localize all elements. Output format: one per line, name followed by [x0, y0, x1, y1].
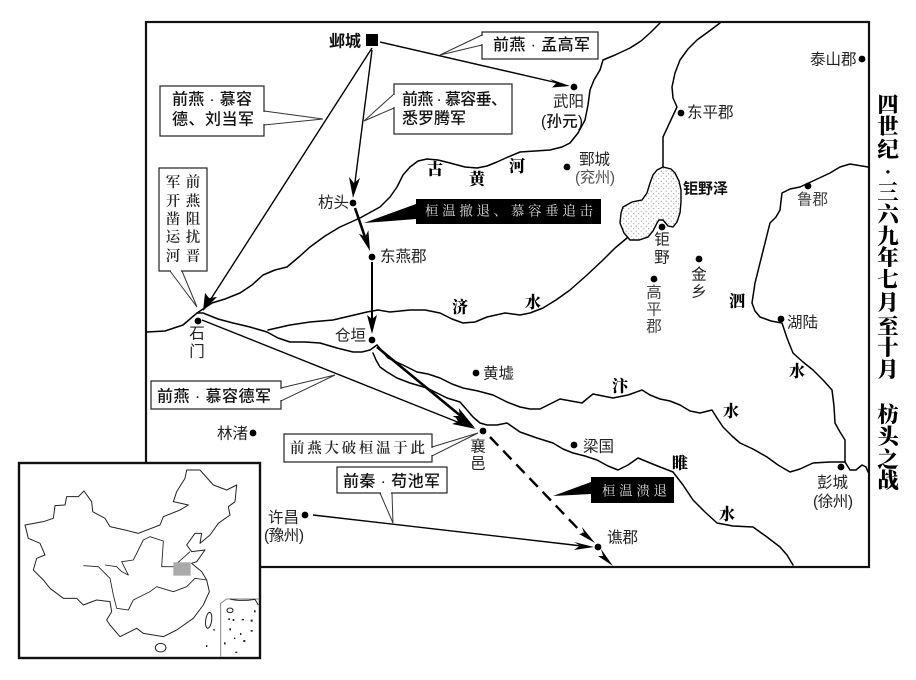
route: retreat Fangtou to Dongyan — [355, 208, 370, 251]
callout: Murong Chui and Xiluo Teng army: 前燕 · 慕容垂、 — [402, 90, 507, 108]
title: vertical heading: 七 — [877, 268, 899, 292]
title: vertical heading: 月 — [877, 291, 899, 315]
title: vertical heading: 年 — [877, 245, 899, 270]
title: vertical heading: 六 — [877, 203, 901, 227]
callout: Murong De and Liu Dang army: 德、刘当军 — [172, 110, 254, 128]
callout: Murong Chui and Xiluo Teng army — [364, 84, 512, 134]
place labels: 石 — [189, 326, 205, 342]
place labels: (兖州) — [575, 168, 615, 186]
lake: Juye Ze — [620, 167, 681, 240]
inset: Yangtze River — [83, 566, 207, 610]
callout: Former Yan blocks the canal — [159, 168, 207, 307]
place labels: 邑 — [470, 456, 486, 472]
place labels: 邺城 — [329, 32, 361, 50]
place labels: 泰山郡 — [810, 50, 857, 68]
place labels: 梁国 — [583, 438, 614, 456]
rivers — [147, 23, 868, 565]
callout: Murong De and Liu Dang army: 前燕 · 慕容 — [172, 90, 252, 108]
river labels: 汴 — [612, 376, 630, 396]
callout: Former Yan blocks the canal: 前 — [186, 174, 201, 191]
route: Yecheng to Shimen — [203, 48, 372, 311]
place labels: (徐州) — [813, 492, 853, 510]
place labels: 门 — [189, 342, 205, 360]
river: canal and Bian branch — [197, 313, 377, 352]
river: Si shui — [752, 164, 868, 472]
river: Bian shui — [377, 345, 845, 472]
callout: Murong De and Liu Dang army — [160, 86, 323, 136]
place labels: 高 — [646, 284, 662, 302]
inset: national border — [25, 470, 237, 637]
title: vertical heading: · — [884, 160, 892, 184]
title: vertical heading: 枋 — [877, 403, 899, 427]
river labels: 睢 — [672, 454, 688, 472]
place labels: 黄墟 — [483, 364, 514, 382]
place labels: 野 — [654, 248, 670, 266]
title: vertical heading: 至 — [877, 315, 899, 339]
callout: Former Yan blocks the canal: 凿 — [166, 210, 181, 228]
place labels: 郡 — [646, 318, 662, 336]
title: vertical heading: 十 — [877, 336, 899, 360]
place labels: (孙元) — [541, 112, 583, 130]
callout: Murong Chui and Xiluo Teng army: 悉罗腾军 — [402, 110, 466, 128]
inset: Hainan island — [155, 643, 166, 652]
river: upper Ji to lake — [663, 23, 720, 167]
callout: Former Yan blocks the canal: 燕 — [186, 193, 202, 210]
marker: Yecheng capital — [366, 34, 378, 46]
river labels: 水 — [723, 402, 739, 420]
place labels: 东平郡 — [687, 104, 734, 122]
title: vertical heading: 世 — [877, 115, 899, 139]
route: retreat Dongyan to Cangyuan — [367, 262, 377, 334]
river labels: 泗 — [729, 292, 745, 310]
place labels: 湖陆 — [787, 314, 818, 332]
place dots — [195, 56, 865, 550]
inset: South China Sea box — [206, 599, 259, 657]
callout: Murong De army — [151, 375, 335, 409]
callout: Former Yan defeats Huan Wen here: 前燕大破桓温于此 — [290, 439, 425, 457]
callout: Meng Gao army — [440, 32, 598, 59]
inset: Yellow River — [105, 537, 190, 575]
title: vertical heading: 头 — [877, 425, 901, 449]
place labels: 枋头 — [318, 194, 349, 212]
title: vertical heading — [877, 93, 901, 493]
callout: Meng Gao army: 前燕 · 孟高军 — [493, 36, 590, 54]
route: retreat Cangyuan to Xiangyi — [377, 347, 475, 428]
title: vertical heading: 纪 — [877, 138, 899, 162]
army routes — [202, 42, 613, 566]
place labels: 许昌 — [268, 508, 299, 526]
place labels: 仓垣 — [335, 326, 366, 344]
callout: Huan Wen routed — [553, 477, 674, 503]
place labels — [189, 32, 857, 546]
place labels: 林渚 — [217, 424, 248, 442]
route: Shimen to Xiangyi — [202, 320, 476, 429]
map frame — [146, 22, 869, 567]
route: Yecheng to Wuyang — [380, 42, 570, 88]
river labels: 水 — [525, 292, 541, 312]
callout: Huan Wen routed: 桓温溃退 — [602, 482, 667, 498]
river: Sui shui — [373, 353, 793, 565]
callout: Former Yan defeats Huan Wen here — [284, 433, 478, 462]
route: Xuchang to Qiaojun — [313, 515, 594, 550]
river labels: 古 — [427, 160, 443, 178]
place labels: (豫州) — [264, 526, 304, 544]
title: vertical heading: 四 — [877, 93, 899, 117]
place labels: 武阳 — [553, 92, 584, 110]
place labels: 金 — [691, 266, 707, 284]
place labels: 钜 — [654, 230, 670, 248]
river: Gu Huanghe — [147, 23, 660, 332]
callout: Former Yan blocks the canal: 军 — [166, 174, 181, 191]
place labels: 鄄城 — [579, 150, 611, 168]
callout: Gou Chi army — [337, 467, 447, 523]
inset: China locator map — [19, 463, 260, 658]
title: vertical heading: 之 — [877, 448, 899, 472]
title: vertical heading: 三 — [877, 181, 899, 205]
river labels: 河 — [509, 158, 525, 176]
callout: Former Yan blocks the canal: 开 — [166, 193, 181, 210]
inset: Taiwan island — [205, 612, 213, 629]
place labels: 彭城 — [817, 474, 849, 492]
river: Ji shui — [268, 238, 627, 330]
place labels: 乡 — [691, 284, 707, 300]
callout: Gou Chi army: 前秦 · 苟池军 — [343, 472, 440, 490]
place labels: 钜野泽 — [683, 180, 728, 198]
callout: Huan Wen retreats, Murong Chui pursues — [364, 199, 601, 224]
route: dashed rout to Qiaojun — [490, 437, 613, 566]
river labels: 水 — [789, 362, 805, 380]
river labels: 黄 — [469, 170, 488, 188]
place labels: 平 — [646, 302, 662, 318]
route: Yecheng to Fangtou — [349, 50, 372, 198]
river labels: 水 — [719, 504, 735, 524]
callout: Huan Wen retreats, Murong Chui pursues: 桓温撤退、慕容垂追击 — [425, 202, 594, 218]
callout: Former Yan blocks the canal: 晋 — [186, 248, 200, 265]
place labels: 谯郡 — [607, 528, 638, 546]
inset: highlighted battle region — [173, 562, 191, 576]
title: vertical heading: 战 — [877, 469, 899, 493]
river labels: 济 — [452, 298, 468, 316]
river labels — [427, 158, 805, 524]
title: vertical heading: 月 — [877, 358, 899, 382]
callout: Former Yan blocks the canal: 扰 — [186, 228, 201, 246]
place labels: 东燕郡 — [380, 248, 427, 266]
title: vertical heading: 九 — [877, 225, 899, 249]
callout: Former Yan blocks the canal: 河 — [166, 248, 181, 265]
callout: Murong De army: 前燕 · 慕容德军 — [157, 386, 271, 406]
place labels: 鲁郡 — [797, 190, 828, 208]
callout: Former Yan blocks the canal: 阻 — [186, 211, 201, 228]
callout: Former Yan blocks the canal: 运 — [166, 229, 181, 246]
place labels: 襄 — [470, 436, 486, 456]
